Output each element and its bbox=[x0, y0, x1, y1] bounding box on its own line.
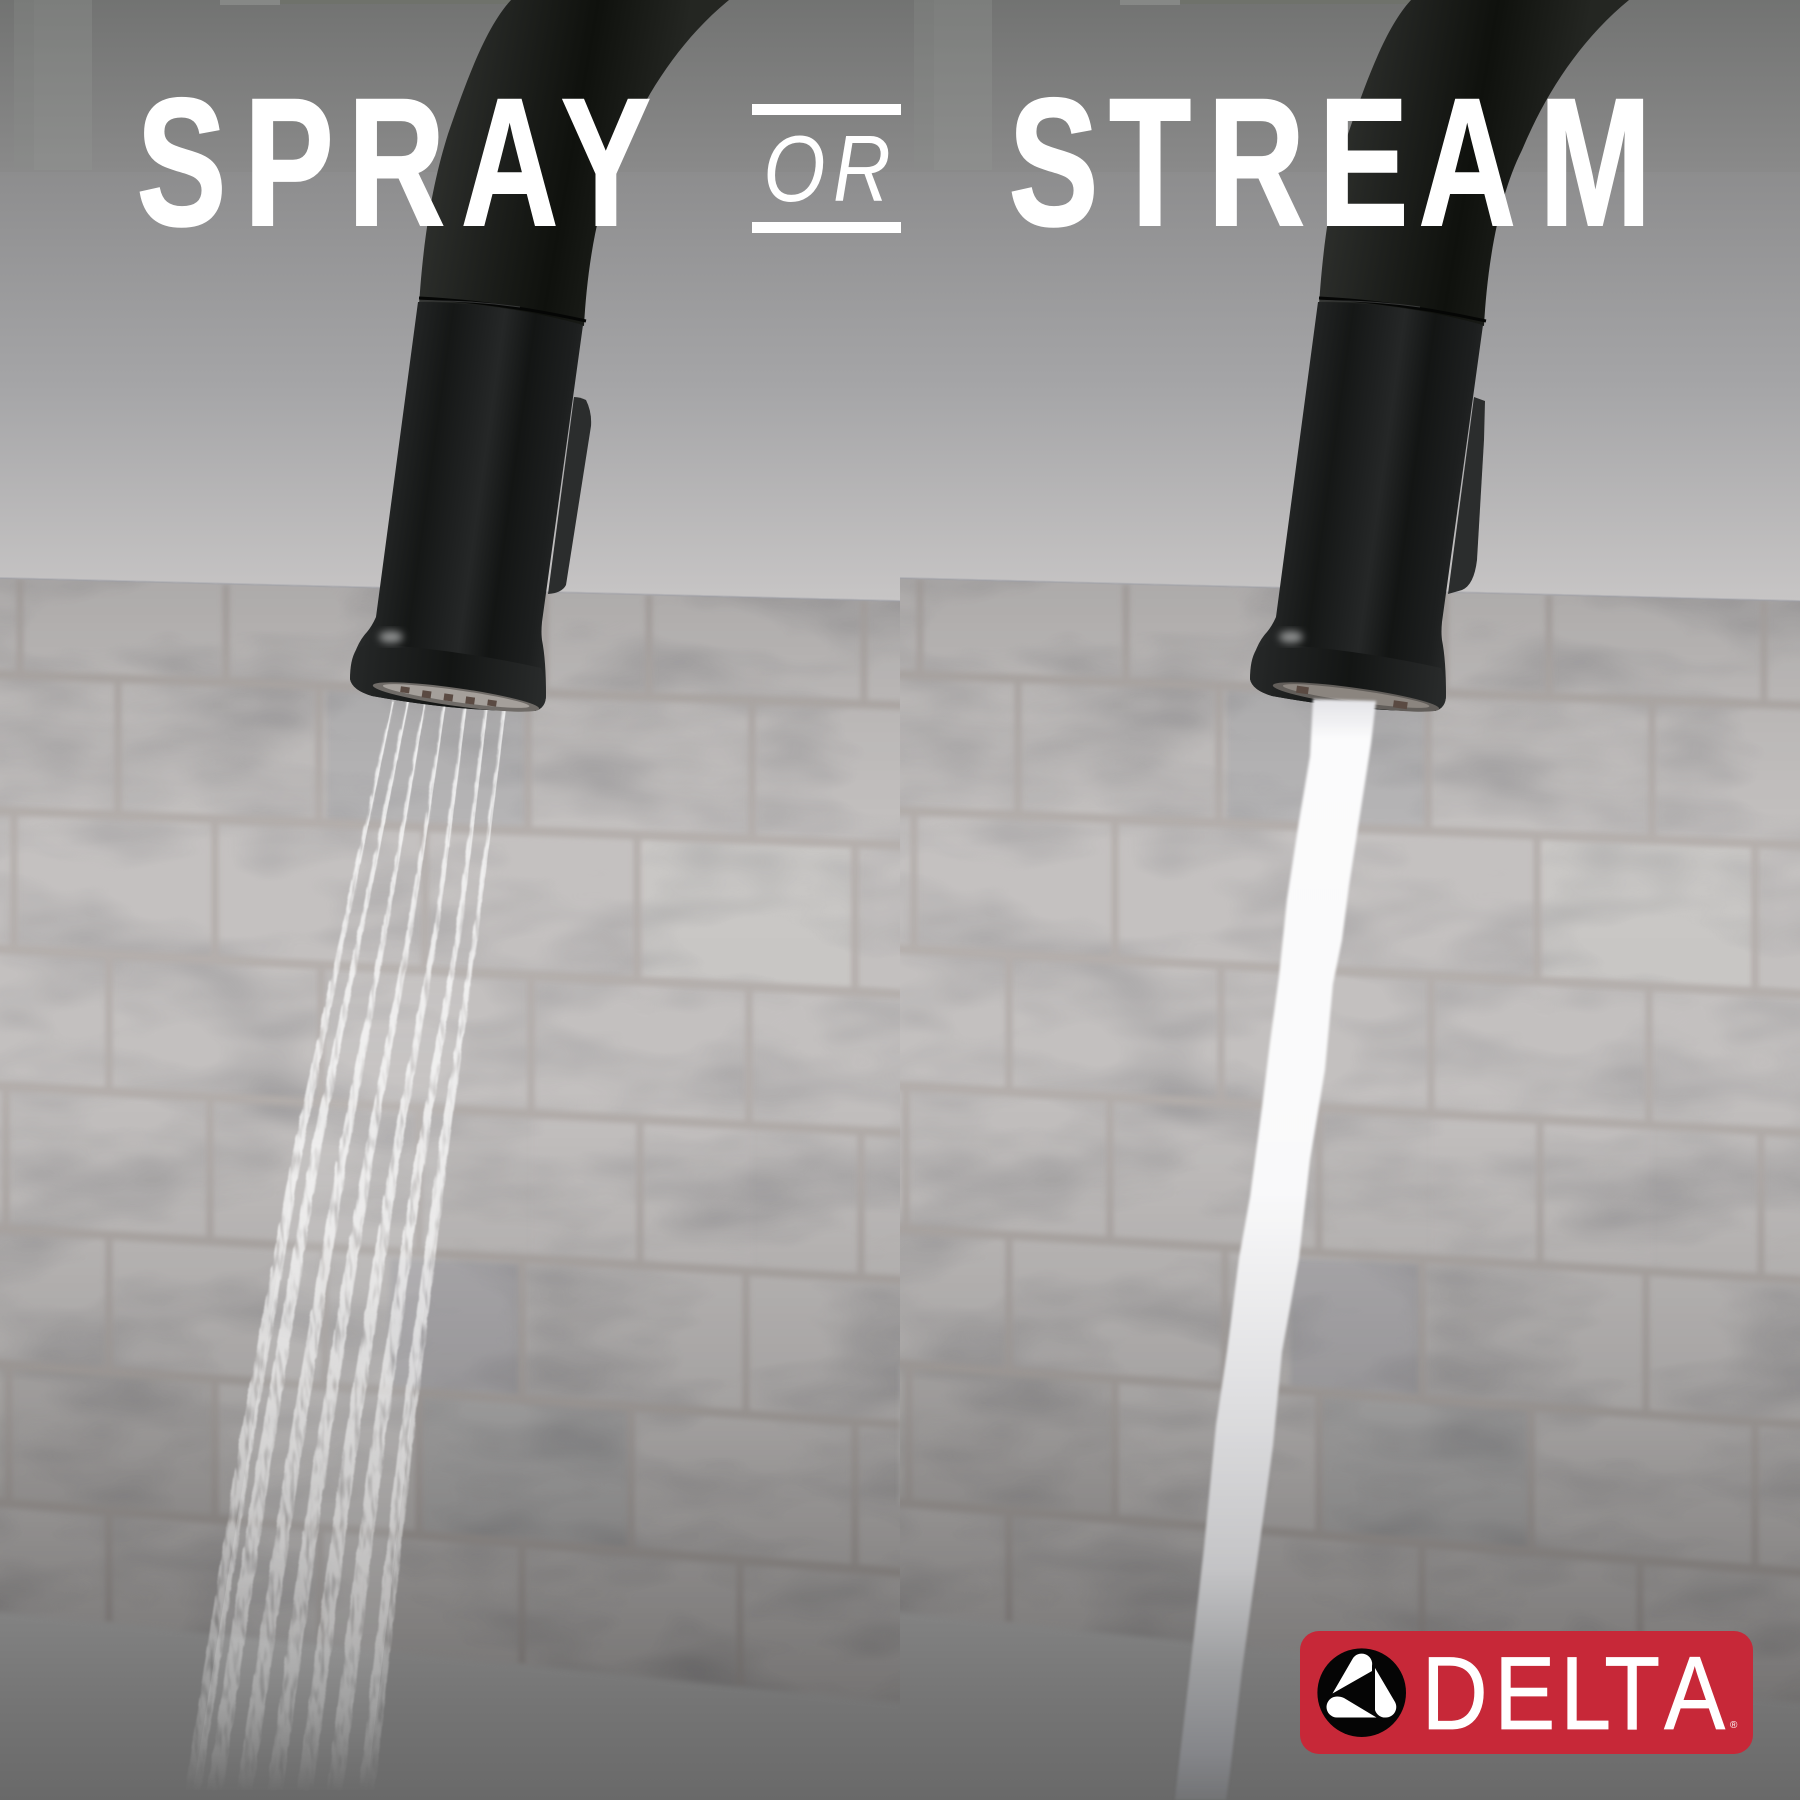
title: SPRAY: SPRAY bbox=[137, 60, 651, 264]
water: spray streams bbox=[185, 700, 506, 1790]
stream selector button bbox=[1448, 397, 1485, 594]
registered mark: ® bbox=[1730, 1720, 1738, 1731]
faucet head, stream mode bbox=[1250, 0, 1629, 718]
faucet head, spray mode bbox=[350, 0, 729, 718]
wordmark: DELTA bbox=[1422, 1635, 1726, 1751]
icon: Delta triangle emblem bbox=[1317, 1648, 1406, 1737]
water: solid stream bbox=[1175, 699, 1376, 1800]
or divider with rules bbox=[752, 104, 901, 233]
spray selector button bbox=[548, 397, 591, 594]
nozzle face with spray jets bbox=[372, 676, 540, 718]
kitchen background: wall and marble tile bbox=[860, 0, 1800, 1800]
panel: stream photo bbox=[860, 0, 1800, 1800]
title: STREAM: STREAM bbox=[1009, 60, 1651, 264]
kitchen background: wall and marble tile bbox=[0, 0, 940, 1800]
or divider with rules: OR bbox=[763, 117, 891, 221]
nozzle face with stream outlet bbox=[1272, 676, 1440, 718]
logo: Delta badge bbox=[1300, 1631, 1753, 1754]
panel: spray photo bbox=[0, 0, 940, 1800]
